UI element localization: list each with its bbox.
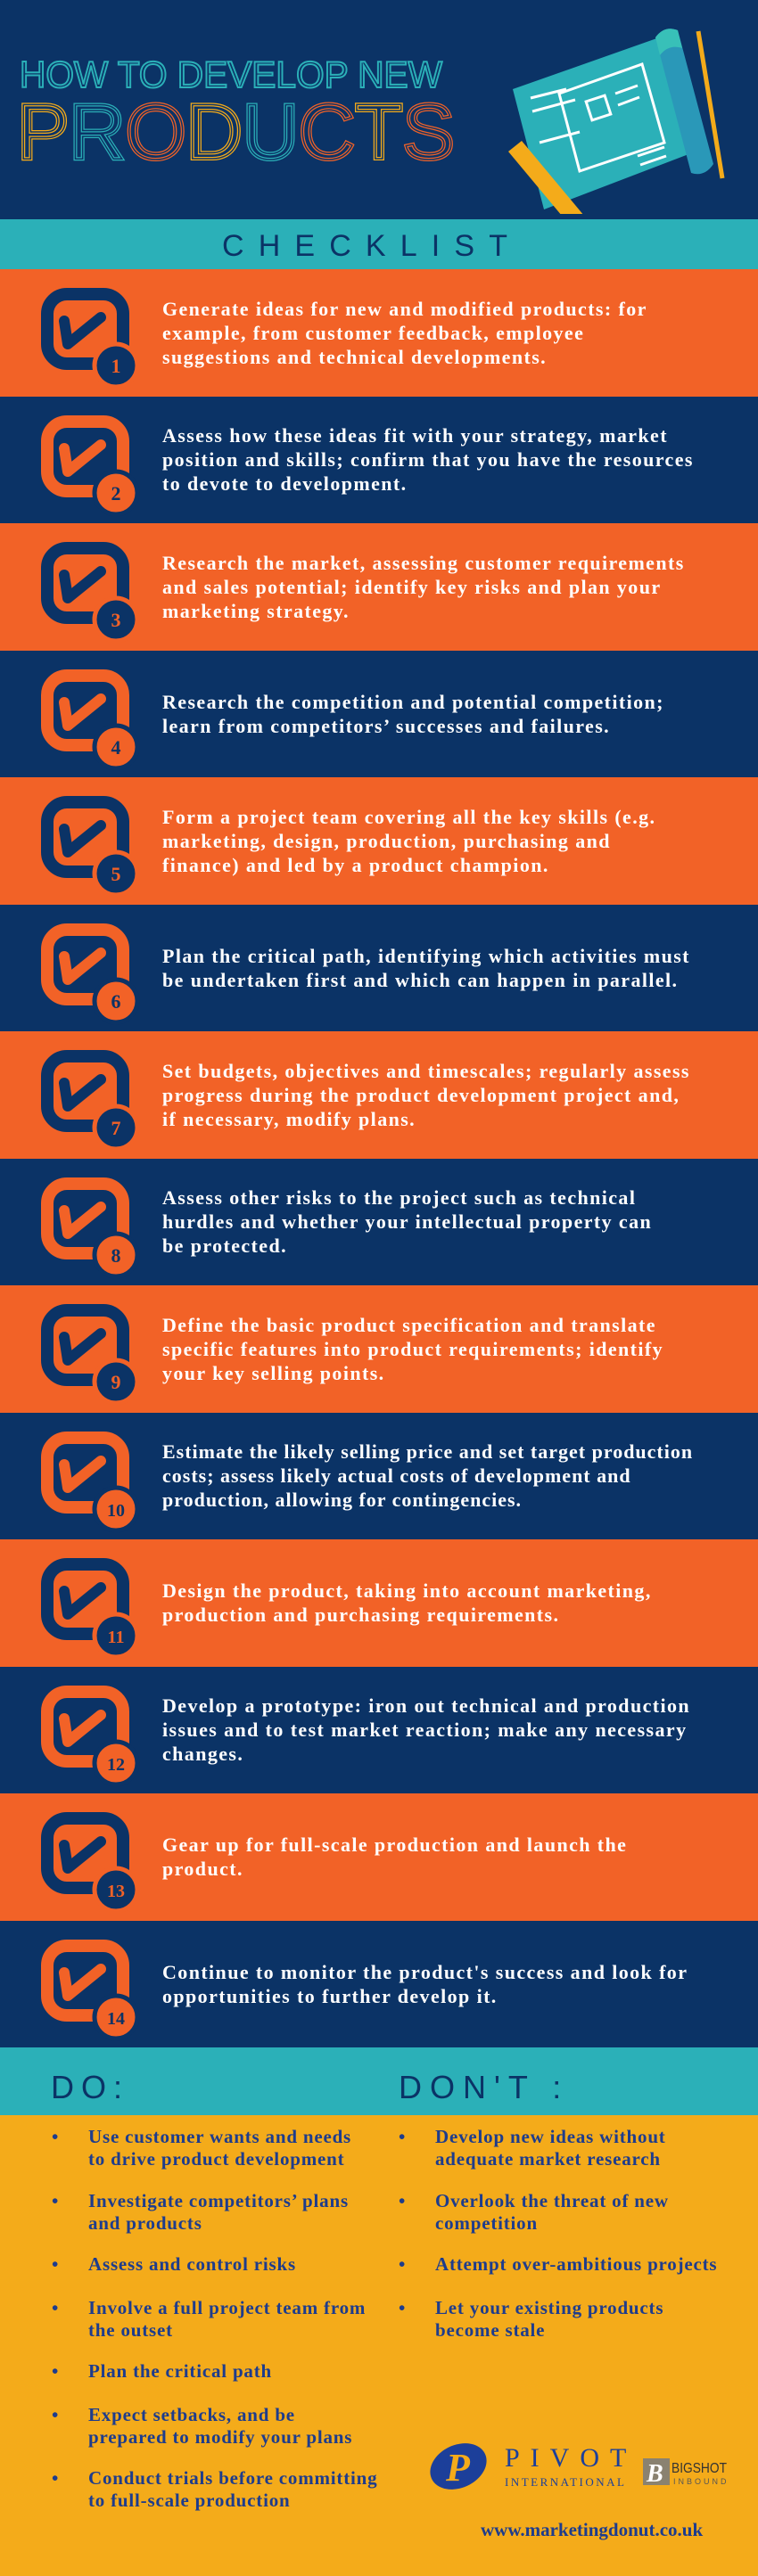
do list: Conduct trials before committing — [88, 2467, 377, 2489]
item 12 — [0, 1667, 758, 1793]
item 2: Assess how these ideas fit with your strategy, market — [162, 424, 668, 447]
panel: do / dont lists — [0, 2115, 758, 2576]
dont list: Develop new ideas without — [435, 2126, 666, 2147]
item 3 — [0, 523, 758, 651]
logo: pivot international — [430, 2443, 627, 2490]
do list: Expect setbacks, and be — [88, 2404, 295, 2425]
item 14: Continue to monitor the product's success and look for — [162, 1961, 688, 1983]
item 6: 6 — [111, 989, 121, 1013]
item 2: 2 — [111, 481, 121, 505]
item 4: Research the competition and potential competition; — [162, 691, 664, 713]
dont list: competition — [435, 2212, 538, 2234]
do/dont heading bar: DO: — [51, 2069, 129, 2105]
item 4: 4 — [111, 736, 121, 758]
item 13: 13 — [107, 1882, 125, 1901]
item 7: Set budgets, objectives and timescales; regularly assess — [162, 1060, 690, 1082]
dont list: Let your existing products — [435, 2297, 663, 2318]
item 4 — [0, 651, 758, 777]
item 9: specific features into product requirements; identify — [162, 1338, 663, 1360]
item 12: 12 — [107, 1754, 125, 1774]
logo: bigshot inbound — [643, 2458, 729, 2487]
do list: to full-scale production — [88, 2490, 290, 2511]
item 14: opportunities to further develop it. — [162, 1985, 498, 2007]
item 1: suggestions and technical developments. — [162, 346, 547, 368]
do list: the outset — [88, 2319, 173, 2341]
item 5 — [0, 777, 758, 904]
item 8: be protected. — [162, 1235, 287, 1257]
illustration: blueprint — [508, 29, 724, 214]
do list: to drive product development — [88, 2148, 344, 2170]
item 10: production, allowing for contingencies. — [162, 1489, 522, 1511]
item 3: marketing strategy. — [162, 600, 350, 622]
item 10 — [0, 1412, 758, 1539]
item 9: Define the basic product specification and translate — [162, 1314, 656, 1336]
dont list: Overlook the threat of new — [435, 2190, 669, 2211]
item 2: to devote to development. — [162, 472, 408, 495]
logo: bigshot inbound: INBOUND — [673, 2477, 729, 2486]
item 2 — [0, 396, 758, 523]
title: PRODUCTS — [17, 87, 455, 176]
do/dont heading bar: DON'T : — [399, 2069, 569, 2105]
item 9: your key selling points. — [162, 1362, 385, 1384]
item 7: progress during the product development project and, — [162, 1084, 680, 1106]
item 12: changes. — [162, 1743, 243, 1765]
do/dont heading bar — [0, 2047, 758, 2115]
item 9: 9 — [111, 1371, 121, 1393]
item 3: 3 — [111, 609, 121, 631]
do list: Plan the critical path — [88, 2360, 272, 2382]
item 5: marketing, design, production, purchasing and — [162, 830, 611, 852]
item 11: Design the product, taking into account marketing, — [162, 1579, 652, 1602]
item 10: Estimate the likely selling price and set target production — [162, 1440, 693, 1463]
item 14: 14 — [107, 2009, 125, 2029]
item 7 — [0, 1031, 758, 1159]
do list — [52, 2126, 377, 2511]
item 1: 1 — [111, 355, 121, 377]
item 10: costs; assess likely actual costs of development and — [162, 1464, 631, 1487]
item 13: Gear up for full-scale production and launch the — [162, 1834, 627, 1856]
do list: and products — [88, 2212, 202, 2234]
dont list: become stale — [435, 2319, 545, 2341]
do list: Investigate competitors’ plans — [88, 2190, 349, 2211]
item 8 — [0, 1159, 758, 1285]
item 12: Develop a prototype: iron out technical and production — [162, 1694, 690, 1717]
item 9 — [0, 1285, 758, 1412]
item 7: if necessary, modify plans. — [162, 1108, 416, 1130]
checklist heading bar — [0, 219, 758, 269]
item 1: example, from customer feedback, employee — [162, 322, 584, 344]
item 11: production and purchasing requirements. — [162, 1604, 559, 1626]
url: www.marketingdonut.co.uk — [481, 2519, 703, 2540]
header — [0, 0, 758, 219]
item 1: Generate ideas for new and modified products: for — [162, 298, 647, 320]
dont list — [400, 2126, 717, 2341]
do list: Involve a full project team from — [88, 2297, 366, 2318]
item 13: product. — [162, 1858, 243, 1880]
item 8: hurdles and whether your intellectual property can — [162, 1210, 652, 1233]
do list: Use customer wants and needs — [88, 2126, 351, 2147]
item 5: 5 — [111, 863, 121, 885]
do list: Assess and control risks — [88, 2253, 296, 2275]
dont list: Attempt over-ambitious projects — [435, 2253, 717, 2275]
checklist heading bar: CHECKLIST — [222, 229, 507, 263]
title: PRODUCTS — [17, 87, 455, 176]
item 3: and sales potential; identify key risks and plan your — [162, 576, 662, 598]
item 8: 8 — [111, 1244, 121, 1266]
item 12: issues and to test market reaction; make any necessary — [162, 1719, 687, 1741]
dont list: adequate market research — [435, 2148, 661, 2170]
item 7: 7 — [111, 1117, 121, 1139]
item 10: 10 — [107, 1501, 125, 1521]
title: HOW TO DEVELOP NEW — [20, 53, 442, 95]
item 6: be undertaken first and which can happen in parallel. — [162, 969, 678, 991]
item 13 — [0, 1793, 758, 1920]
item 5: finance) and led by a product champion. — [162, 854, 549, 876]
item 14 — [0, 1920, 758, 2047]
item 11: 11 — [108, 1628, 124, 1647]
do list: prepared to modify your plans — [88, 2426, 352, 2448]
item 6: Plan the critical path, identifying which activities must — [162, 945, 690, 967]
item 3: Research the market, assessing customer requirements — [162, 552, 685, 574]
item 4: learn from competitors’ successes and failures. — [162, 715, 610, 737]
item 8: Assess other risks to the project such as technical — [162, 1186, 636, 1209]
item 11 — [0, 1539, 758, 1667]
item 5: Form a project team covering all the key skills (e.g. — [162, 806, 655, 828]
item 1 — [0, 269, 758, 396]
item 6 — [0, 904, 758, 1031]
item 2: position and skills; confirm that you have the resources — [162, 448, 694, 471]
logo: pivot international: INTERNATIONAL — [505, 2475, 626, 2489]
logo: pivot international: P — [445, 2446, 471, 2490]
